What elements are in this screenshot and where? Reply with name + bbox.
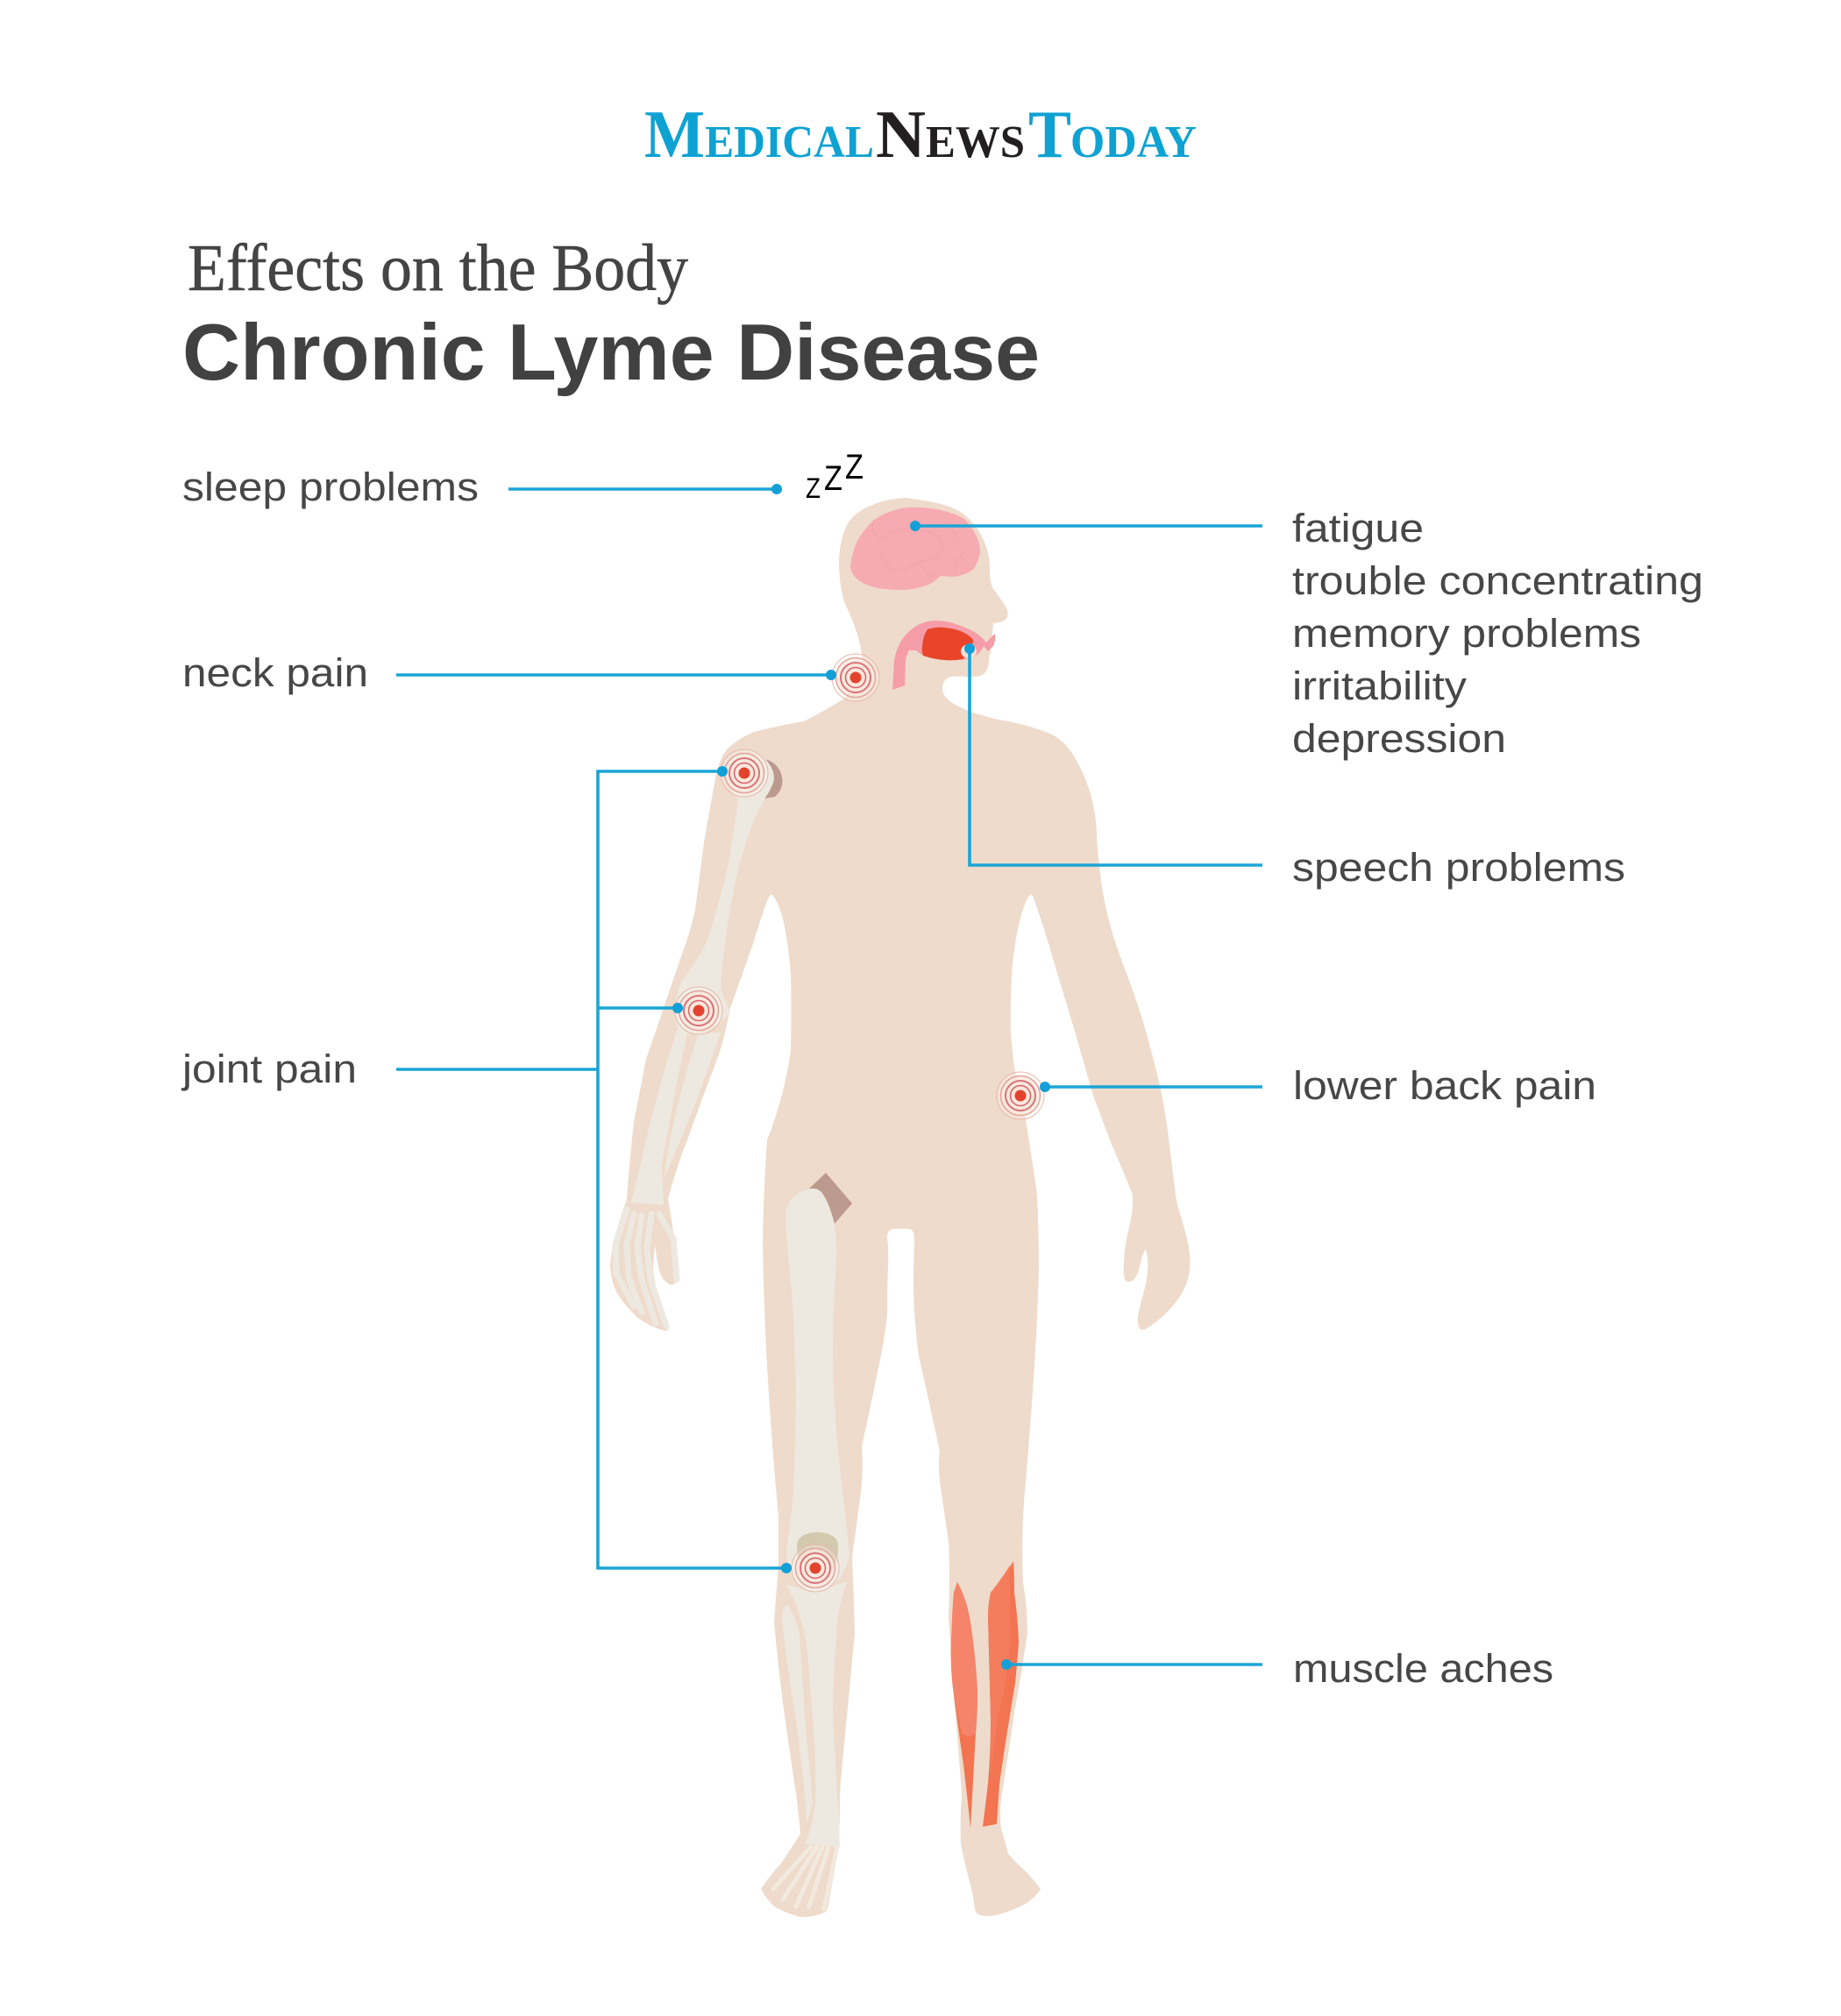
logo: Medical News Today: [644, 96, 1197, 172]
callout: speech problems: speech problems: [1292, 845, 1625, 890]
logo: Medical News Today: ODAY: [1070, 117, 1197, 167]
icon: sleep zzz: Z: [806, 472, 821, 504]
callout: lower back pain: lower back pain: [1293, 1063, 1596, 1108]
throat and mouth: [892, 621, 995, 690]
shoulder socket: [756, 759, 782, 799]
hand bones: [615, 1210, 677, 1326]
pain target: elbow: [675, 987, 722, 1034]
icon: sleep zzz: Z: [824, 459, 842, 498]
callout: joint pain: joint pain: [181, 1047, 357, 1091]
pain target: lower back: [997, 1072, 1044, 1119]
arm bones: [631, 755, 774, 1205]
callout: brain symptoms list: trouble concentrating: [1292, 558, 1703, 603]
logo: Medical News Today: M: [644, 96, 705, 172]
callout: joint pain: [181, 766, 792, 1573]
callout: speech problems: [964, 643, 1625, 890]
tongue: [922, 628, 973, 660]
body silhouette: [610, 498, 1191, 1917]
calf muscle: inner: [951, 1582, 977, 1828]
pain target: knee: [792, 1544, 839, 1592]
foot bones: [773, 1847, 837, 1909]
logo: Medical News Today: EWS: [926, 117, 1025, 167]
callout: neck pain: neck pain: [182, 650, 368, 695]
pelvis fragment: [809, 1173, 852, 1224]
logo: Medical News Today: EDICAL: [705, 117, 874, 167]
kneecap: [797, 1532, 838, 1569]
calf muscle: outer: [983, 1561, 1019, 1827]
brain: [850, 508, 980, 590]
logo: Medical News Today: N: [876, 96, 926, 172]
callout: brain symptoms list: irritability: [1292, 664, 1468, 708]
teeth: [961, 644, 977, 658]
leg bones: [782, 1189, 849, 1847]
icon: sleep zzz: Z: [845, 448, 864, 486]
callout: lower back pain: [1040, 1063, 1596, 1108]
callout: brain symptoms list: fatigue: [1292, 506, 1424, 550]
human body illustration: [610, 498, 1191, 1917]
logo: Medical News Today: T: [1028, 96, 1071, 172]
callout: neck pain: [182, 650, 836, 695]
callout: muscle aches: muscle aches: [1293, 1646, 1553, 1691]
callout: brain symptoms list: depression: [1292, 716, 1506, 761]
callout: sleep problems: [182, 465, 782, 509]
callout: brain symptoms list: [910, 506, 1703, 761]
title: Chronic Lyme Disease: Chronic Lyme Disease: [182, 309, 1040, 397]
callout: sleep problems: sleep problems: [182, 465, 479, 509]
icon: sleep zzz: [806, 448, 864, 504]
subtitle: Effects on the Body: Effects on the Body: [188, 231, 688, 305]
callout: muscle aches: [1001, 1646, 1553, 1691]
pain target: shoulder: [721, 749, 768, 797]
callout: brain symptoms list: memory problems: [1292, 611, 1641, 656]
pain target: neck: [832, 654, 879, 701]
